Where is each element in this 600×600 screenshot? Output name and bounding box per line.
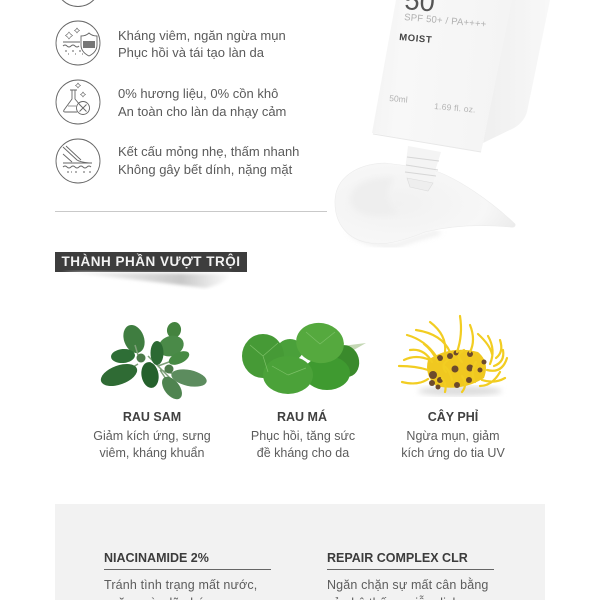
feature text: light texture (118, 144, 299, 176)
section heading: ingredients (55, 252, 247, 272)
ingredient text: centella: Phục hồi, tăng sức (251, 428, 355, 442)
feature text: fragrance free: An toàn cho làn da nhạy cảm (118, 104, 286, 118)
active text: Tránh tình trạng mất nước, (104, 578, 257, 592)
ingredient text: centella (251, 428, 355, 460)
feature text: anti inflammatory (118, 28, 286, 60)
product: tube and cream: SPF 50+ / PA++++ (404, 12, 487, 30)
section heading: ingredients: THÀNH PHẦN VƯỢT TRỘI (62, 254, 240, 268)
feature text: anti inflammatory: Kháng viêm, ngăn ngừa mụn (118, 28, 286, 42)
feature icon: anti acne shield (56, 20, 100, 66)
ingredient text: purslane: viêm, kháng khuẩn (100, 446, 204, 460)
ingredient name: witch hazel: CÂY PHỈ (428, 410, 478, 424)
feature text: light texture: Không gây bết dính, nặng mặt (118, 162, 292, 176)
ingredient text: purslane: Giảm kích ứng, sưng (93, 428, 211, 442)
ingredient name: purslane: RAU SAM (123, 410, 181, 424)
active text: Ngăn chặn sự mất cân bằng (327, 578, 489, 592)
active title: REPAIR COMPLEX CLR (327, 551, 468, 565)
product: tube and cream: 1.69 fl. oz. (434, 101, 476, 115)
feature icon: flask with cross (56, 80, 100, 124)
active: repair complex (327, 551, 494, 600)
feature text: light texture: Kết cấu mỏng nhẹ, thấm nhanh (118, 144, 299, 159)
ingredient text: centella: đề kháng cho da (257, 446, 349, 460)
product: tube and cream: 50ml (389, 93, 408, 105)
ingredient text: witch hazel: kích ứng do tia UV (401, 446, 505, 460)
active rule (327, 568, 494, 570)
active: niacinamide (104, 551, 271, 600)
feature icon: light texture (56, 138, 100, 184)
active text (327, 578, 489, 600)
product: tube and cream: MOIST (399, 32, 433, 46)
ingredient name: centella: RAU MÁ (277, 410, 327, 424)
feature text: fragrance free: 0% hương liệu, 0% cồn khô (118, 86, 278, 101)
ingredient text: witch hazel: Ngừa mụn, giảm (406, 428, 500, 442)
feature icon: top circle (62, 0, 94, 7)
active rule (104, 568, 271, 570)
active text (104, 578, 257, 600)
ingredient text: witch hazel (401, 428, 505, 460)
feature text: fragrance free (118, 86, 286, 118)
ingredient text: purslane (93, 428, 211, 460)
panel: key actives (55, 504, 545, 600)
divider (55, 211, 327, 212)
feature text: anti inflammatory: Phục hồi và tái tạo làn da (118, 45, 264, 60)
active title: NIACINAMIDE 2% (104, 551, 209, 565)
